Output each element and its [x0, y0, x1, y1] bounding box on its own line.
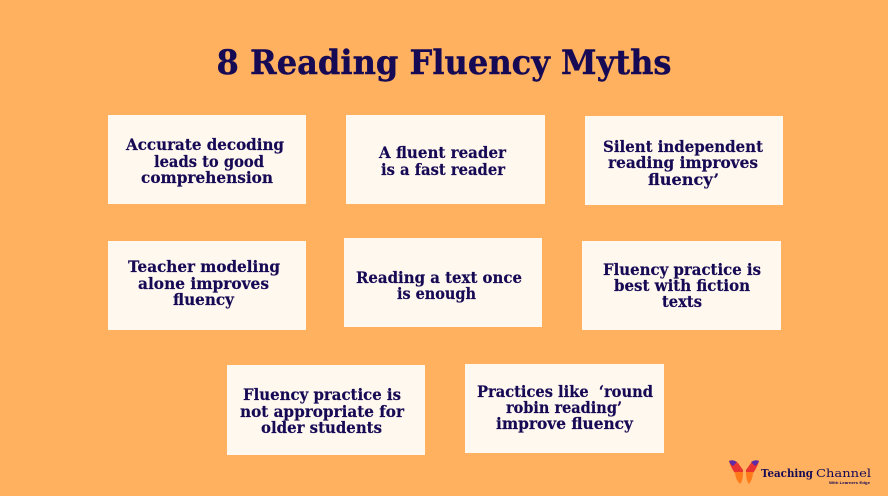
panel: myth 6: Fluency practice is	[603, 260, 761, 279]
panel: myth 3: Silent independent	[603, 137, 764, 156]
panel: myth 3: reading improves	[608, 153, 758, 172]
panel: myth 4: Teacher modeling	[128, 257, 280, 276]
panel: myth 7: Fluency practice is	[243, 385, 401, 404]
panel: myth 3: fluency’	[648, 170, 719, 189]
logo: Teaching Channel	[729, 460, 871, 485]
panel: myth 5: is enough	[397, 284, 476, 303]
panel: myth 5: Reading a text once	[356, 268, 522, 287]
panel: myth 2: A fluent reader	[378, 143, 507, 162]
panel: myth 1: Accurate decoding	[125, 135, 284, 154]
panel: myth 6	[582, 241, 781, 330]
panel: myth 7	[227, 365, 425, 455]
panel: myth 8	[465, 364, 664, 453]
panel: myth 4	[108, 241, 306, 330]
panel: myth 1: comprehension	[141, 168, 273, 187]
panel: myth 2: is a fast reader	[381, 160, 506, 179]
panel: myth 1	[108, 115, 306, 204]
panel: myth 8: robin reading’	[506, 398, 622, 417]
panel: myth 7: older students	[261, 418, 382, 437]
panel: myth 6: best with fiction	[614, 276, 750, 295]
title: 8 Reading Fluency Myths	[216, 43, 672, 83]
logo: Teaching Channel: Channel	[816, 466, 871, 480]
panel: myth 3	[585, 116, 783, 205]
icon: butterfly	[729, 460, 759, 484]
logo wordmark: Teaching	[761, 466, 813, 480]
panel: myth 4: alone improves	[138, 274, 269, 293]
panel: myth 5	[344, 238, 542, 327]
panel: myth 8: Practices like ‘round	[477, 382, 653, 401]
panel: myth 2	[346, 115, 545, 204]
panel: myth 4: fluency	[173, 290, 235, 309]
logo tagline: With Learners Edge	[829, 481, 870, 485]
panel: myth 1: leads to good	[154, 152, 264, 171]
panel: myth 6: texts	[662, 292, 702, 311]
panel: myth 8: improve fluency	[496, 414, 634, 433]
panel: myth 7: not appropriate for	[240, 402, 405, 421]
